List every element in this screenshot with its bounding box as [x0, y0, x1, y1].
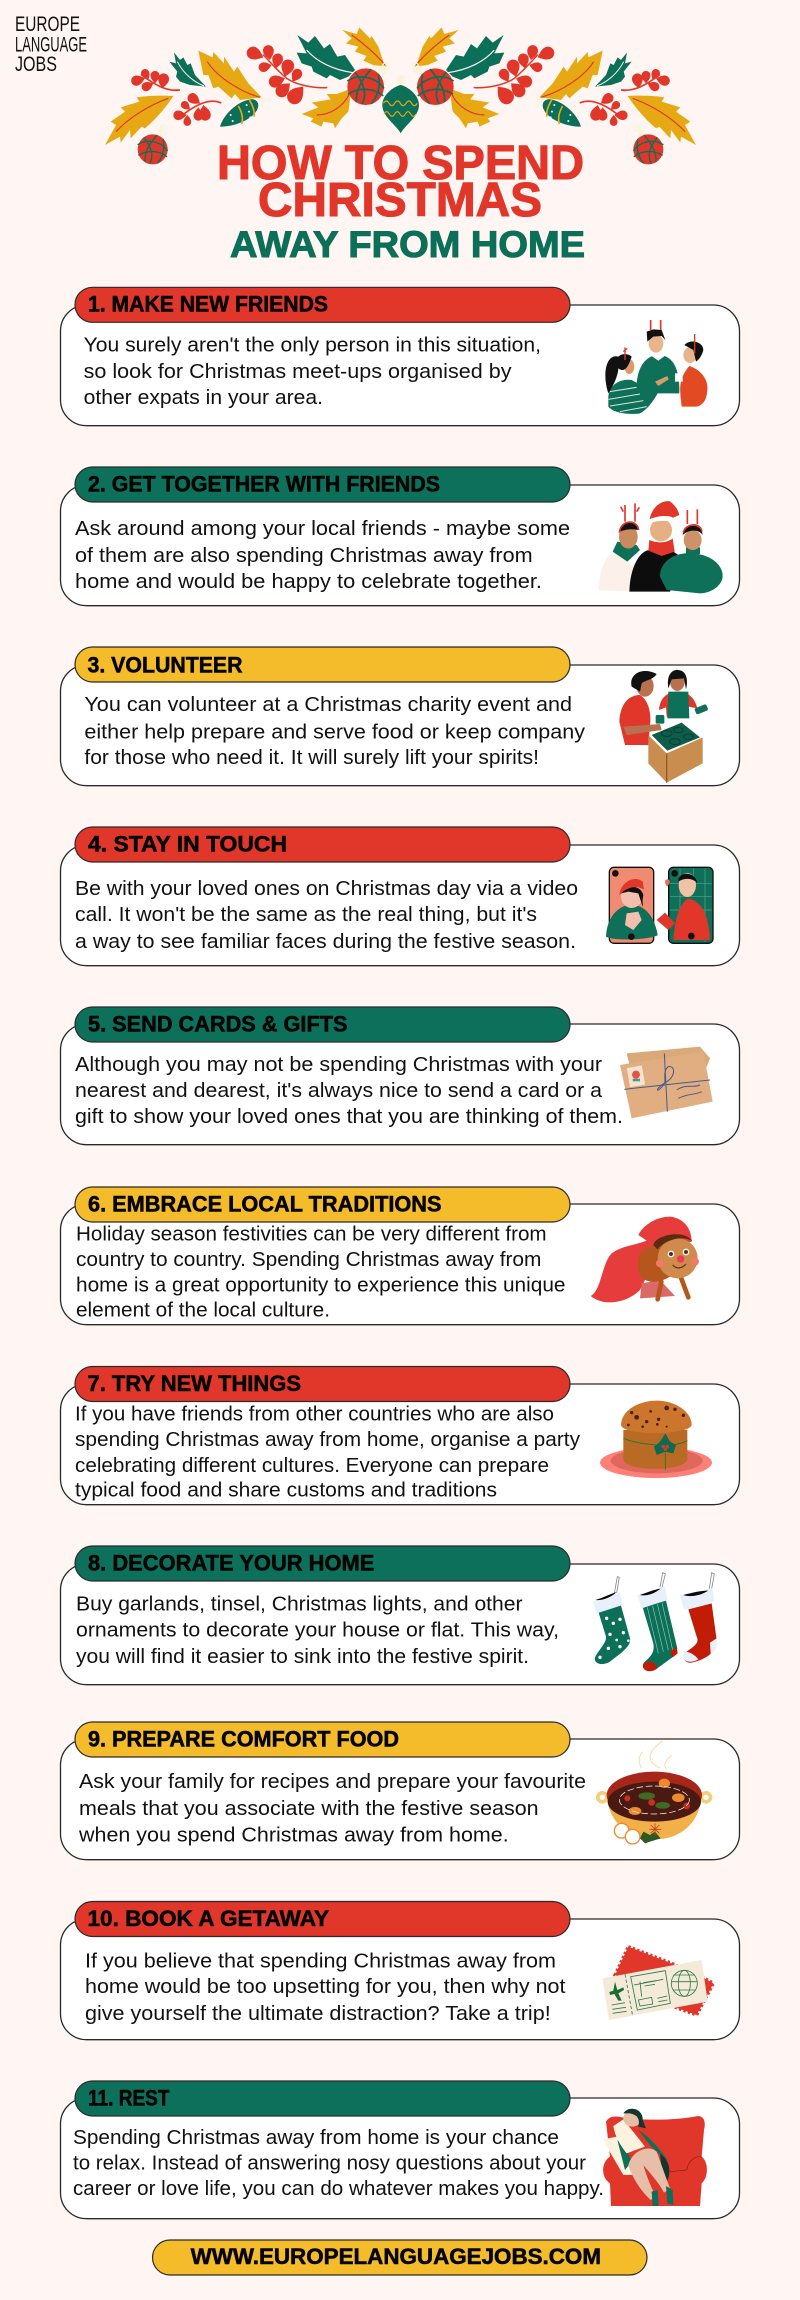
- panel 6: embrace local traditions: Holiday season festivities can be very different from: [76, 1223, 547, 1246]
- panel 3: volunteer: for those who need it. It will surely lift your spirits!: [84, 746, 539, 769]
- panel 10: book a getaway: home would be too upsetting for you, then why not: [85, 1975, 566, 1998]
- panel 4: stay in touch: 4. STAY IN TOUCH: [88, 832, 287, 857]
- panel 7: try new things: typical food and share customs and traditions: [75, 1479, 497, 1502]
- panel 8: decorate your home: Buy garlands, tinsel, Christmas lights, and other: [76, 1593, 523, 1616]
- logo: Europe Language Jobs: EUROPE: [15, 13, 80, 36]
- panel 3: volunteer: 3. VOLUNTEER: [88, 653, 243, 678]
- panel 7: try new things: [60, 1366, 740, 1505]
- icon: three friends singing: [598, 501, 723, 593]
- panel 11: rest: career or love life, you can do whatever makes you happy.: [73, 2177, 604, 2200]
- panel 4: stay in touch: a way to see familiar faces during the festive season.: [75, 930, 576, 953]
- title: CHRISTMAS: [258, 174, 542, 227]
- centre ornament: [382, 75, 419, 133]
- icon: volunteers packing box: [619, 670, 708, 783]
- panel 10: book a getaway: 10. BOOK A GETAWAY: [88, 1906, 329, 1931]
- panel 2: get together with friends: of them are also spending Christmas away from: [75, 544, 533, 567]
- panel 3: volunteer: [60, 647, 740, 786]
- title: AWAY FROM HOME: [230, 223, 585, 265]
- icon: panettone on a plate: [600, 1401, 712, 1478]
- panel 8: decorate your home: 8. DECORATE YOUR HOME: [88, 1551, 374, 1576]
- panel 7: try new things: 7. TRY NEW THINGS: [88, 1371, 301, 1396]
- panel 7: try new things: If you have friends from other countries who are also: [75, 1403, 554, 1426]
- panel 5: send cards and gifts: [60, 1007, 740, 1145]
- panel 5: send cards and gifts: 5. SEND CARDS & GIFTS: [88, 1012, 348, 1037]
- panel 9: prepare comfort food: [60, 1722, 740, 1860]
- garland: left half: [105, 27, 389, 164]
- panel 4: stay in touch: call. It won't be the same as the real thing, but it's: [75, 903, 537, 926]
- title: HOW TO SPEND: [217, 137, 584, 190]
- panel 10: book a getaway: [60, 1902, 740, 2040]
- panel 3: volunteer: You can volunteer at a Christmas charity event and: [84, 693, 572, 716]
- panel 4: stay in touch: Be with your loved ones on Christmas day via a video: [75, 877, 578, 900]
- panel 1: make new friends: other expats in your area.: [84, 386, 323, 409]
- garland: right half (mirror): [412, 27, 696, 164]
- panel 8: decorate your home: ornaments to decorate your house or flat. This way,: [76, 1619, 559, 1642]
- panel 11: rest: to relax. Instead of answering nosy questions about your: [73, 2151, 586, 2174]
- panel 2: get together with friends: home and would be happy to celebrate together.: [75, 570, 542, 593]
- panel 6: embrace local traditions: 6. EMBRACE LOCAL TRADITIONS: [88, 1192, 442, 1217]
- panel 11: rest: 11. REST: [88, 2086, 170, 2111]
- panel 3: volunteer: either help prepare and serve food or keep company: [84, 720, 586, 743]
- panel 9: prepare comfort food: meals that you associate with the festive season: [79, 1797, 539, 1820]
- panel 5: send cards and gifts: gift to show your loved ones that you are thinking of them.: [75, 1105, 623, 1128]
- panel 6: embrace local traditions: [60, 1187, 740, 1325]
- panel 1: make new friends: so look for Christmas meet-ups organised by: [84, 360, 512, 383]
- panel 5: send cards and gifts: Although you may not be spending Christmas with your: [75, 1053, 602, 1076]
- panel 10: book a getaway: give yourself the ultimate distraction? Take a trip!: [85, 2002, 551, 2025]
- panel 7: try new things: spending Christmas away from home, organise a party: [75, 1428, 581, 1451]
- icon: video call on two phones: [606, 867, 713, 943]
- title: [217, 137, 585, 265]
- panel 2: get together with friends: Ask around among your local friends - maybe some: [75, 517, 570, 540]
- panel 4: stay in touch: [60, 827, 740, 966]
- panel 6: embrace local traditions: element of the local culture.: [76, 1299, 330, 1322]
- panel 5: send cards and gifts: nearest and dearest, it's always nice to send a card or a: [75, 1079, 603, 1102]
- logo: Europe Language Jobs: JOBS: [15, 53, 57, 76]
- panel 1: make new friends: You surely aren't the only person in this situation,: [84, 334, 541, 357]
- icon: plane ticket and stamps: [602, 1947, 713, 2020]
- panel 8: decorate your home: you will find it easier to sink into the festive spirit.: [76, 1645, 529, 1668]
- panel 11: rest: Spending Christmas away from home is your chance: [73, 2126, 559, 2149]
- panel 10: book a getaway: If you believe that spending Christmas away from: [85, 1950, 556, 1973]
- icon: smiling log in red cape: [591, 1217, 699, 1302]
- panel 1: make new friends: [60, 287, 740, 426]
- panel 2: get together with friends: [60, 467, 740, 606]
- panel 7: try new things: celebrating different cultures. Everyone can prepare: [75, 1454, 549, 1477]
- icon: three friends with antlers: [605, 320, 707, 414]
- panel 6: embrace local traditions: country to country. Spending Christmas away from: [76, 1248, 541, 1271]
- logo: Europe Language Jobs: [15, 13, 87, 76]
- panel 9: prepare comfort food: 9. PREPARE COMFORT FOOD: [88, 1727, 399, 1752]
- icon: parcel tied with string: [620, 1047, 713, 1118]
- icon: bowl of stew: [596, 1741, 712, 1844]
- panel 2: get together with friends: 2. GET TOGETHER WITH FRIENDS: [88, 472, 440, 497]
- call to action: website: [152, 2240, 647, 2275]
- panel 1: make new friends: 1. MAKE NEW FRIENDS: [88, 292, 328, 317]
- call to action: website: WWW.EUROPELANGUAGEJOBS.COM: [191, 2244, 601, 2269]
- panel 6: embrace local traditions: home is a great opportunity to experience this unique: [76, 1274, 566, 1297]
- panel 11: rest: [60, 2081, 740, 2219]
- icon: woman relaxing in armchair: [603, 2109, 707, 2206]
- panel 9: prepare comfort food: when you spend Christmas away from home.: [78, 1824, 509, 1847]
- panel 9: prepare comfort food: Ask your family for recipes and prepare your favourite: [79, 1770, 586, 1793]
- logo: Europe Language Jobs: LANGUAGE: [15, 34, 87, 56]
- panel 8: decorate your home: [60, 1546, 740, 1685]
- icon: three stockings: [593, 1573, 717, 1671]
